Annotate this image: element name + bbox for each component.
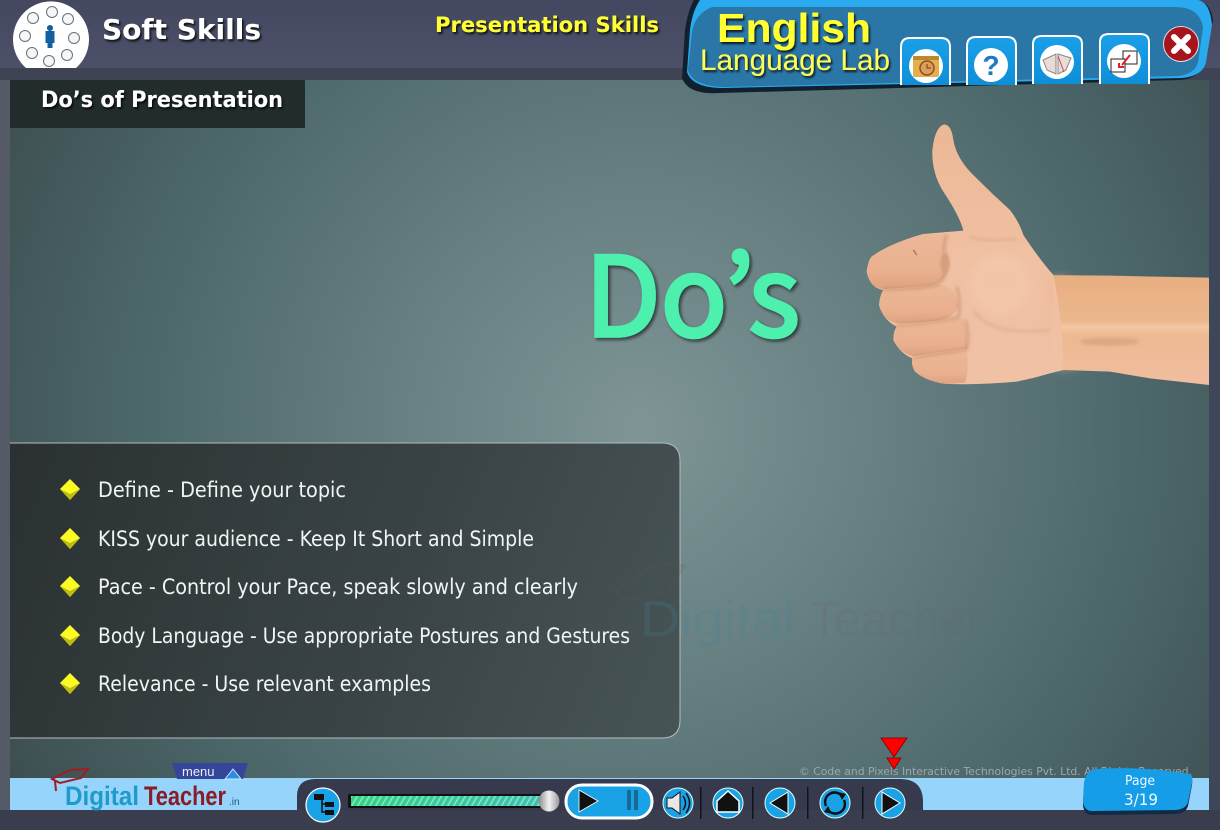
menu tab	[172, 763, 248, 779]
watermark: Digital Teacher: Teacher	[810, 591, 982, 647]
list item: Relevance: Relevance - Use relevant examples	[98, 672, 431, 696]
list item: Body Language: Body Language - Use appropriate Postures and Gestures	[98, 624, 630, 648]
list item: Pace: Pace - Control your Pace, speak slowly and clearly	[98, 575, 578, 599]
page counter: 3/19	[1124, 790, 1158, 809]
icon: next button	[875, 788, 905, 818]
heading: English: English	[717, 5, 871, 51]
play pause button	[566, 785, 652, 818]
progress bar	[348, 790, 560, 812]
top header bar	[0, 0, 1220, 80]
icon: previous button	[765, 788, 795, 818]
icon: resize tab	[1100, 34, 1149, 84]
heading: Presentation Skills: Presentation Skills	[435, 13, 659, 37]
page counter: Page	[1125, 774, 1155, 789]
watermark: Digital Teacher: Digital	[640, 591, 795, 647]
icon: folder clock tab	[901, 38, 950, 85]
icon: replay button	[820, 788, 850, 818]
heading: Language Lab: Language Lab	[700, 44, 890, 77]
ring finger	[893, 318, 967, 356]
heading: Soft Skills: Soft Skills	[102, 13, 261, 46]
menu tab: menu	[182, 764, 215, 779]
little finger	[912, 351, 968, 384]
icon: book tab	[1033, 36, 1082, 84]
big heading: Do's: Do’s	[585, 208, 800, 368]
footer bar	[0, 778, 1220, 830]
icon: help tab	[967, 37, 1016, 85]
page counter	[1083, 768, 1192, 815]
title: Do's of Presentation	[10, 80, 305, 128]
panel: English Language Lab header	[682, 0, 1213, 93]
logo: Digital Teacher: Teacher	[144, 781, 226, 811]
list item: KISS: KISS your audience - Keep It Short and Simple	[98, 527, 534, 551]
icon: home button	[713, 788, 743, 818]
wrist blend	[1056, 280, 1065, 367]
logo: Digital Teacher	[52, 769, 240, 811]
icon: soft skills logo	[13, 1, 89, 68]
logo: Digital Teacher: .in	[229, 797, 240, 808]
middle finger	[879, 285, 959, 323]
icon: thumbs up hand	[867, 124, 1209, 385]
title: Do's of Presentation: Do’s of Presentation	[41, 88, 283, 113]
index finger	[867, 234, 947, 289]
icon: red arrow marker	[881, 738, 907, 769]
panel: list of do's	[10, 443, 680, 738]
icon: close button	[1164, 26, 1198, 62]
list item: Define: Define - Define your topic	[98, 478, 346, 502]
icon: tree menu button	[306, 788, 340, 822]
icon: help tab: ?	[982, 50, 1000, 81]
watermark: Digital Teacher	[615, 562, 982, 647]
icon: volume button	[663, 788, 693, 818]
copyright notice: © Code and Pixels Interactive Technologies Pvt. Ltd. All Rights Reserved.	[799, 765, 1192, 778]
panel: player controls	[297, 779, 923, 830]
logo: Digital Teacher: Digital	[65, 781, 139, 811]
